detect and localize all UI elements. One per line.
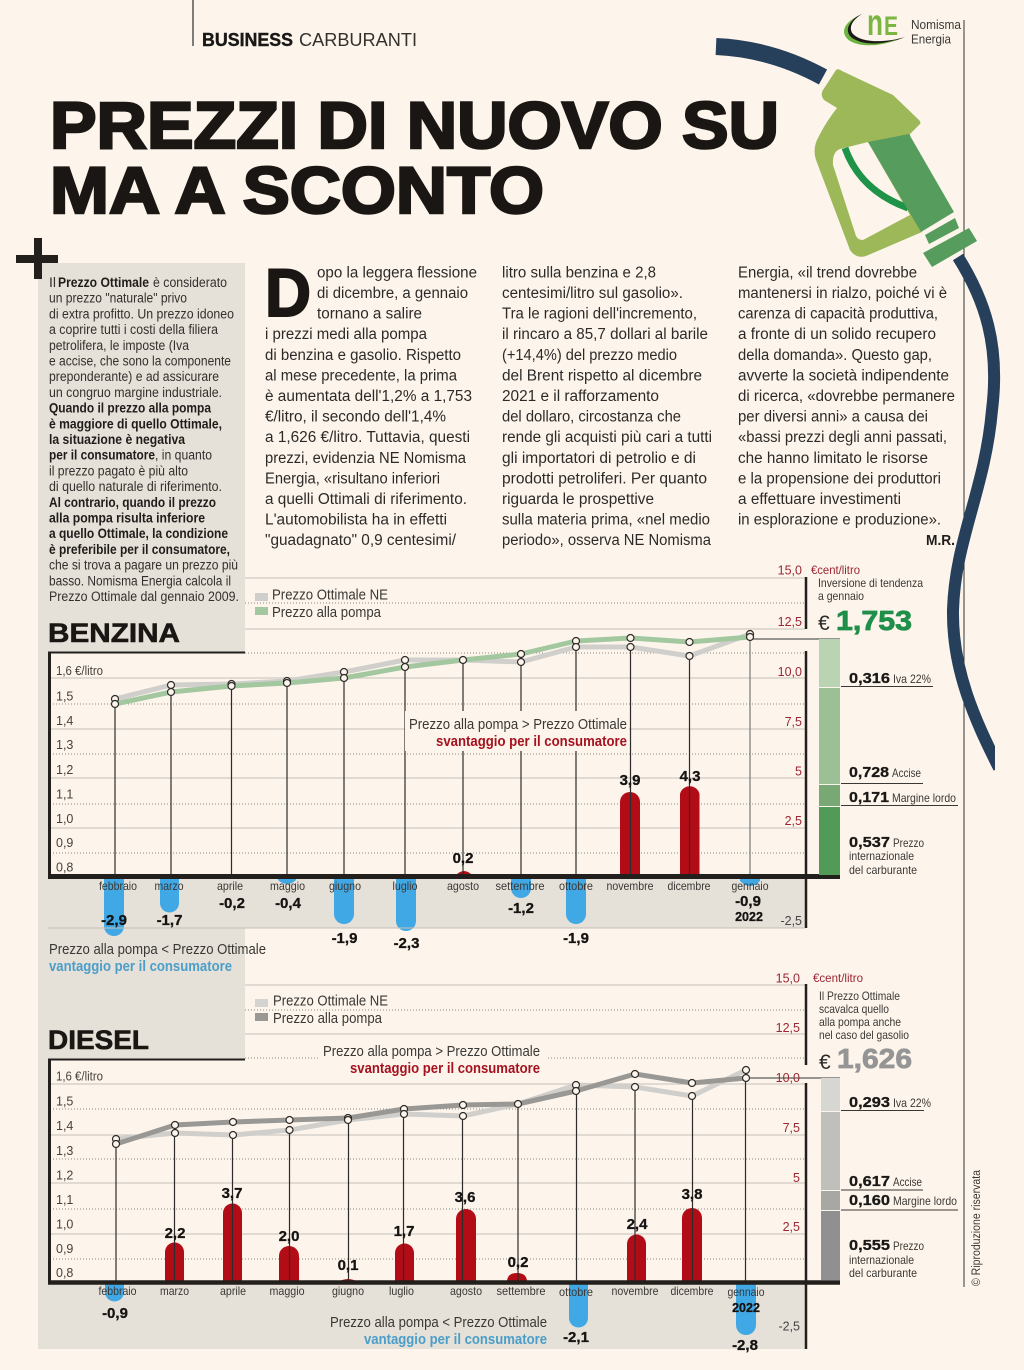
- diesel right axis labels: €cent/litro: [813, 971, 863, 985]
- diesel red bars: [165, 1204, 702, 1282]
- chart: diesel: [48, 971, 863, 1354]
- diesel price stack: internazionale: [849, 1253, 914, 1267]
- benzina right axis labels: €cent/litro: [811, 563, 860, 577]
- benzina price stack: internazionale: [849, 849, 914, 863]
- diesel price box: scavalca quello: [819, 1002, 889, 1016]
- article column 2: centesimi/litro sul gasolio».: [502, 285, 683, 302]
- benzina left axis labels: 1,6 €/litro: [56, 664, 103, 678]
- sidebar text: Il: [49, 275, 56, 290]
- article column 2: del dollaro, circostanza che: [502, 409, 681, 426]
- benzina price stack: [819, 639, 958, 877]
- article column 2: [502, 264, 712, 549]
- diesel values: -0,9: [102, 1305, 128, 1322]
- diesel month labels: settembre: [496, 1284, 546, 1298]
- icon: fuel hose: [716, 46, 1009, 790]
- diesel values: 3,6: [455, 1189, 475, 1206]
- diesel series: prezzo ottimale: [116, 1070, 746, 1139]
- article column 2: rende gli acquisti più cari a tutti: [502, 429, 712, 446]
- sidebar text: Prezzo Ottimale dal gennaio 2009.: [49, 589, 239, 604]
- diesel values: 2,2: [165, 1225, 185, 1242]
- article column 3: per diversi anni» a causa dei: [738, 409, 928, 426]
- title: [50, 88, 779, 227]
- benzina markers: [112, 630, 754, 708]
- benzina left axis labels: 1,5: [56, 690, 73, 704]
- sidebar text: a coprire tutti i costi della filiera: [49, 322, 218, 337]
- diesel values: -2,1: [563, 1329, 589, 1346]
- diesel values: 3,7: [222, 1185, 242, 1202]
- diesel month labels: [98, 1284, 765, 1299]
- benzina price stack: 0,171: [849, 789, 889, 806]
- benzina price stack: Iva 22%: [893, 672, 931, 686]
- article column 1 with drop cap: D: [265, 255, 311, 331]
- article column 2: Tra le ragioni dell'incremento,: [502, 306, 697, 323]
- benzina annotation above: Prezzo alla pompa > Prezzo Ottimale: [409, 716, 627, 733]
- sidebar text: un prezzo "naturale" privo: [49, 291, 187, 306]
- article column 3: [738, 264, 955, 549]
- benzina right axis labels: 7,5: [785, 715, 802, 729]
- benzina values: -1,9: [563, 930, 589, 947]
- sidebar text: petrolifera, le imposte (Iva: [49, 338, 189, 353]
- benzina values: 3,9: [620, 772, 640, 789]
- diesel left axis labels: 1,0: [56, 1218, 73, 1232]
- benzina left axis labels: 1,1: [56, 788, 73, 802]
- diesel month labels: ottobre: [559, 1285, 593, 1299]
- benzina price box: [818, 576, 923, 636]
- benzina price stack: 0,316: [849, 670, 890, 687]
- sidebar text: preponderante) e ad assicurare: [49, 369, 219, 384]
- diesel price box: Il Prezzo Ottimale: [819, 989, 900, 1003]
- benzina legend: Prezzo alla pompa: [272, 604, 382, 621]
- benzina month labels: luglio: [392, 879, 418, 893]
- section header: [193, 0, 417, 50]
- diesel month labels: gennaio: [728, 1285, 765, 1299]
- chart: benzina: [48, 563, 860, 975]
- article column 2: il rincaro a 85,7 dollari al barile: [502, 326, 708, 343]
- sidebar text: è maggiore di quello Ottimale,: [49, 416, 222, 431]
- diesel values: 2022: [732, 1301, 760, 1315]
- title: MA A SCONTO: [50, 153, 544, 227]
- article column 3: che hanno limitato le risorse: [738, 450, 928, 467]
- article column 1 with drop cap: di dicembre, a gennaio: [317, 285, 468, 302]
- section header: CARBURANTI: [299, 30, 417, 50]
- benzina left axis labels: 0,8: [56, 860, 73, 874]
- article column 3: della domanda». Questo gap,: [738, 347, 932, 364]
- icon: fuel nozzle: [815, 69, 977, 267]
- diesel price box: [819, 989, 912, 1074]
- benzina right axis labels: 15,0: [778, 564, 802, 578]
- diesel frame and axes: [48, 984, 840, 1349]
- right vertical rule: [963, 20, 965, 1287]
- benzina price box: 1,753: [836, 605, 912, 636]
- diesel right axis labels: 5: [793, 1171, 800, 1185]
- diesel month labels: giugno: [332, 1284, 364, 1298]
- diesel grid: [50, 985, 805, 1259]
- article column 2: sulla materia prima, «nel medio: [502, 512, 710, 529]
- article column 1 with drop cap: Energia, «risultano inferiori: [265, 470, 440, 487]
- diesel left axis labels: 1,6 €/litro: [56, 1070, 103, 1084]
- diesel left axis labels: 1,5: [56, 1094, 73, 1108]
- benzina red bars: [455, 786, 700, 876]
- logo: Nomisma Energia: E: [884, 11, 898, 41]
- article column 2: (+14,4%) del prezzo medio: [502, 347, 677, 364]
- diesel left axis labels: [56, 1070, 103, 1280]
- diesel legend: Prezzo alla pompa: [273, 1010, 383, 1027]
- benzina month labels: giugno: [329, 879, 361, 893]
- benzina grid: [50, 578, 805, 853]
- diesel left axis labels: 1,1: [56, 1193, 73, 1207]
- sidebar text: a quello Ottimale, la condizione: [49, 526, 228, 541]
- diesel price stack: 0,555: [849, 1237, 890, 1254]
- diesel drop lines: [116, 1078, 746, 1284]
- benzina heading: BENZINA: [48, 618, 180, 648]
- diesel values: 2,0: [279, 1228, 299, 1245]
- copyright note: © Riproduzione riservata: [971, 1169, 983, 1286]
- article column 3: e la propensione dei produttori: [738, 470, 941, 487]
- benzina legend: [255, 586, 388, 621]
- diesel month labels: febbraio: [98, 1284, 137, 1298]
- diesel price stack: Prezzo: [893, 1239, 924, 1253]
- benzina blue bars: [104, 878, 760, 936]
- diesel markers: [112, 1066, 750, 1148]
- diesel blue bars: [105, 1284, 756, 1335]
- article column 3: mantenersi in rialzo, poiché vi è: [738, 285, 947, 302]
- article column 2: 2021 e il rafforzamento: [502, 388, 659, 405]
- benzina left axis labels: 1,3: [56, 738, 73, 752]
- diesel values: 1,7: [394, 1223, 414, 1240]
- icon: plus sign: [16, 238, 58, 279]
- diesel left axis labels: 1,3: [56, 1144, 73, 1158]
- diesel values: 3,8: [682, 1186, 702, 1203]
- diesel month labels: agosto: [450, 1284, 482, 1298]
- diesel price box: alla pompa anche: [819, 1015, 901, 1029]
- diesel annotation below: [330, 1314, 547, 1348]
- sidebar text: alla pompa risulta inferiore: [49, 510, 205, 526]
- diesel values: [102, 1185, 760, 1354]
- diesel month labels: maggio: [270, 1284, 305, 1298]
- article column 3: a effettuare investimenti: [738, 491, 901, 508]
- benzina values: 2022: [735, 910, 763, 924]
- diesel heading: DIESEL: [48, 1025, 149, 1055]
- benzina annotation below: Prezzo alla pompa < Prezzo Ottimale: [49, 941, 266, 958]
- article column 3: carenza di capacità produttiva,: [738, 306, 938, 323]
- benzina month labels: gennaio: [732, 879, 769, 893]
- title: PREZZI DI NUOVO SU: [50, 88, 779, 162]
- article column 1 with drop cap: prezzi, evidenzia NE Nomisma: [265, 450, 466, 467]
- diesel right axis labels: 10,0: [776, 1071, 800, 1085]
- benzina annotation above: [405, 711, 629, 751]
- diesel annotation below: vantaggio per il consumatore: [364, 1332, 547, 1348]
- sidebar text: che si trova a pagare un prezzo più: [49, 558, 238, 573]
- diesel price stack: 0,160: [849, 1192, 890, 1209]
- benzina month labels: febbraio: [99, 879, 137, 893]
- diesel month labels: marzo: [160, 1284, 189, 1298]
- benzina values: -0,2: [219, 895, 245, 912]
- diesel price stack: Accise: [893, 1175, 922, 1189]
- benzina month labels: marzo: [154, 879, 184, 893]
- diesel legend: [255, 992, 388, 1027]
- benzina price stack: Prezzo: [893, 836, 924, 850]
- benzina left axis labels: 0,9: [56, 836, 73, 850]
- benzina right axis labels: 2,5: [785, 814, 802, 828]
- sidebar text: Quando il prezzo alla pompa: [49, 401, 211, 416]
- benzina price box: €: [818, 612, 830, 635]
- benzina month labels: agosto: [447, 879, 479, 893]
- benzina price stack: del carburante: [849, 863, 917, 877]
- article column 1 with drop cap: a 1,626 €/litro. Tuttavia, questi: [265, 429, 470, 446]
- section header: BUSINESS: [202, 30, 293, 50]
- diesel price box: €: [819, 1051, 831, 1074]
- benzina annotation below: [49, 941, 266, 975]
- diesel price stack: del carburante: [849, 1266, 917, 1280]
- diesel right axis labels: 12,5: [776, 1021, 800, 1035]
- diesel left axis labels: 0,9: [56, 1242, 73, 1256]
- article column 3: di ricerca, «dovrebbe permanere: [738, 388, 955, 405]
- sidebar text: , in quanto: [155, 448, 212, 463]
- benzina month labels: aprile: [217, 879, 243, 893]
- article column 2: gli importatori di petrolio e di: [502, 450, 696, 467]
- sidebar text: [49, 275, 239, 604]
- diesel values: 2,4: [627, 1216, 648, 1233]
- diesel legend: Prezzo Ottimale NE: [273, 992, 388, 1010]
- benzina values: -1,9: [332, 930, 357, 947]
- article column 1 with drop cap: di benzina e gasolio. Rispetto: [265, 347, 461, 364]
- logo: Nomisma Energia: Energia: [911, 32, 951, 46]
- diesel month labels: luglio: [389, 1284, 414, 1298]
- diesel price box: nel caso del gasolio: [819, 1028, 909, 1042]
- article column 2: periodo», osserva NE Nomisma: [502, 532, 711, 549]
- diesel annotation below: Prezzo alla pompa < Prezzo Ottimale: [330, 1314, 547, 1331]
- benzina annotation below: vantaggio per il consumatore: [49, 959, 232, 975]
- benzina month labels: [99, 879, 769, 893]
- sidebar text: Prezzo Ottimale: [58, 275, 149, 290]
- diesel right axis labels: [776, 971, 863, 1334]
- article column 1 with drop cap: tornano a salire: [317, 306, 422, 323]
- benzina series: prezzo alla pompa: [115, 637, 750, 704]
- benzina right axis labels: 5: [795, 764, 802, 778]
- benzina month labels: maggio: [270, 879, 305, 893]
- article column 3: M.R.: [926, 533, 955, 549]
- benzina series: prezzo ottimale: [115, 634, 750, 699]
- article column 1 with drop cap: opo la leggera flessione: [317, 264, 477, 282]
- benzina values: -2,3: [394, 935, 419, 952]
- sidebar text: la situazione è negativa: [49, 432, 185, 447]
- sidebar text: e accise, che sono la componente: [49, 354, 231, 368]
- benzina values: [101, 768, 763, 952]
- logo: Nomisma Energia: [844, 2, 961, 46]
- sidebar text: è preferibile per il consumatore,: [49, 542, 230, 557]
- article column 1 with drop cap: al mese precedente, la prima: [265, 367, 457, 384]
- article column 1 with drop cap: L'automobilista ha in effetti: [265, 512, 447, 529]
- diesel right axis labels: 15,0: [776, 972, 800, 986]
- diesel month labels: dicembre: [670, 1284, 714, 1298]
- article column 3: Energia, «il trend dovrebbe: [738, 264, 917, 282]
- diesel connector to stack: [746, 1077, 840, 1079]
- diesel left axis labels: 1,4: [56, 1119, 73, 1133]
- article column 1 with drop cap: €/litro, il secondo dell'1,4%: [265, 409, 446, 426]
- article column 3: in esplorazione e produzione».: [738, 512, 941, 529]
- sidebar text: è considerato: [153, 275, 227, 290]
- article column 2: riguarda le prospettive: [502, 491, 654, 508]
- diesel price box: 1,626: [837, 1043, 912, 1074]
- diesel month labels: aprile: [220, 1284, 246, 1298]
- diesel right axis labels: 2,5: [783, 1220, 800, 1234]
- benzina price stack: Margine lordo: [892, 791, 956, 805]
- article column 1 with drop cap: i prezzi medi alla pompa: [265, 326, 427, 343]
- article column 2: prodotti petroliferi. Per quanto: [502, 470, 707, 487]
- sidebar text: un congruo margine industriale.: [49, 385, 222, 400]
- diesel series: prezzo alla pompa: [116, 1074, 746, 1144]
- article column 3: avverte la società indipendente: [738, 367, 949, 384]
- diesel values: 0,1: [338, 1257, 358, 1274]
- diesel annotation above: Prezzo alla pompa > Prezzo Ottimale: [323, 1043, 540, 1060]
- benzina legend: Prezzo Ottimale NE: [272, 586, 388, 604]
- sidebar text: il prezzo pagato è più alto: [49, 463, 188, 478]
- benzina month labels: settembre: [496, 879, 545, 893]
- benzina price stack: 0,537: [849, 834, 890, 851]
- sidebar text: per il consumatore: [49, 448, 155, 463]
- diesel price stack: 0,617: [849, 1173, 890, 1190]
- benzina month labels: ottobre: [559, 879, 593, 893]
- logo: Nomisma Energia: n: [867, 2, 883, 43]
- diesel left axis labels: 1,2: [56, 1168, 73, 1182]
- benzina price stack: Accise: [892, 766, 921, 780]
- benzina price box: Inversione di tendenza: [818, 576, 923, 590]
- diesel annotation above: [318, 1042, 548, 1077]
- article column 1 with drop cap: [265, 255, 477, 549]
- article column 2: del Brent rispetto al dicembre: [502, 367, 702, 384]
- benzina values: 0,2: [453, 850, 473, 867]
- diesel price stack: 0,293: [849, 1094, 890, 1111]
- benzina drop lines: [115, 647, 690, 878]
- logo: Nomisma Energia: Nomisma: [911, 18, 961, 32]
- sidebar text: basso. Nomisma Energia calcola il: [49, 573, 231, 588]
- benzina right axis labels: 10,0: [778, 665, 802, 679]
- benzina values: -1,7: [157, 912, 182, 929]
- benzina values: -2,9: [101, 912, 127, 929]
- diesel right axis labels: 7,5: [783, 1121, 800, 1135]
- benzina left axis labels: 1,2: [56, 763, 73, 777]
- sidebar text: di extra profitto. Un prezzo idoneo: [49, 306, 234, 321]
- benzina right axis labels: [778, 563, 860, 928]
- diesel values: 0,2: [508, 1254, 528, 1271]
- article column 3: «bassi prezzi degli anni passati,: [738, 429, 947, 446]
- benzina price box: a gennaio: [818, 589, 864, 603]
- diesel month labels: novembre: [612, 1284, 659, 1298]
- benzina month labels: novembre: [606, 879, 654, 893]
- diesel left axis labels: 0,8: [56, 1266, 73, 1280]
- diesel right axis labels: -2,5: [778, 1320, 800, 1334]
- diesel values: -2,8: [732, 1337, 758, 1354]
- benzina price stack: 0,728: [849, 764, 889, 781]
- benzina annotation above: svantaggio per il consumatore: [436, 734, 627, 750]
- diesel price stack: Margine lordo: [893, 1194, 957, 1208]
- benzina left axis labels: 1,0: [56, 812, 73, 826]
- article column 3: a fronte di un solido recupero: [738, 326, 936, 343]
- benzina connector to stack: [750, 638, 840, 640]
- benzina values: -0,9: [735, 893, 761, 910]
- benzina left axis labels: 1,4: [56, 714, 73, 728]
- article column 1 with drop cap: è aumentata dell'1,2% a 1,753: [265, 388, 472, 405]
- benzina values: -0,4: [275, 895, 302, 912]
- diesel annotation above: svantaggio per il consumatore: [350, 1061, 540, 1077]
- article column 2: litro sulla benzina e 2,8: [502, 264, 656, 282]
- sidebar text: Al contrario, quando il prezzo: [49, 495, 216, 510]
- benzina left axis labels: [56, 664, 103, 874]
- sidebar text: di quello naturale di riferimento.: [49, 479, 222, 494]
- diesel price stack: Iva 22%: [893, 1096, 931, 1110]
- grey background panel: [38, 263, 805, 1349]
- benzina month labels: dicembre: [668, 879, 711, 893]
- benzina values: -1,2: [508, 900, 534, 917]
- benzina right axis labels: 12,5: [778, 615, 802, 629]
- diesel price stack: [821, 1078, 958, 1280]
- benzina right axis labels: -2,5: [780, 914, 802, 928]
- benzina frame and axes: [48, 577, 840, 928]
- article column 1 with drop cap: a quelli Ottimali di riferimento.: [265, 491, 467, 508]
- benzina values: 4,3: [680, 768, 700, 785]
- article column 1 with drop cap: "guadagnato" 0,9 centesimi/: [265, 532, 457, 549]
